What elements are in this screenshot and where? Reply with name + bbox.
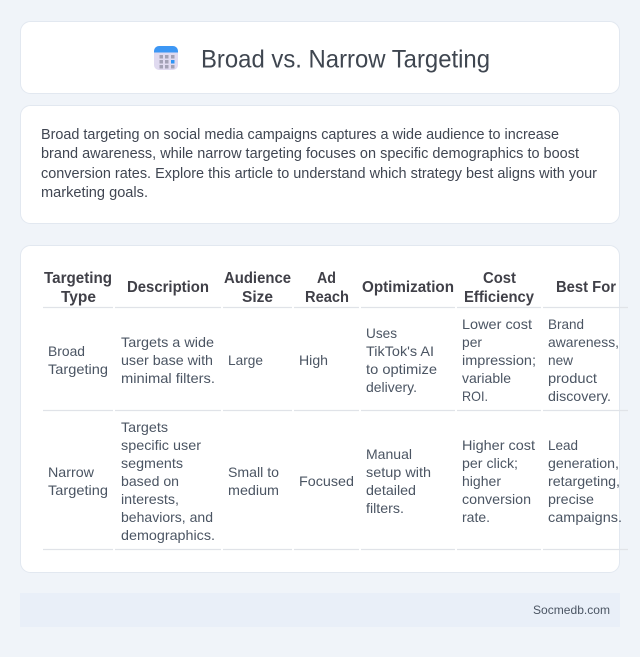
table row: broad targeting: to optimize xyxy=(366,361,437,377)
table row: narrow targeting: detailed xyxy=(366,482,416,498)
text block: introduction: Broad targeting on social media campaigns captures a wide audience to increase xyxy=(41,127,559,143)
table header row: Cost xyxy=(483,270,517,287)
text block: introduction: brand awareness, while narrow targeting focuses on specific demographics to boost xyxy=(41,146,579,162)
table row: narrow targeting xyxy=(48,419,622,543)
table header row: Ad xyxy=(317,270,336,287)
table row: narrow targeting: generation, xyxy=(548,455,619,471)
table row: broad targeting: awareness, xyxy=(548,334,619,350)
table row: broad targeting: Broad xyxy=(48,343,85,359)
table header row: Description xyxy=(127,279,209,296)
table row: narrow targeting: based on xyxy=(121,473,179,489)
table header row: Targeting xyxy=(44,270,112,287)
table header row: Reach xyxy=(305,289,349,306)
table row: narrow targeting: medium xyxy=(228,482,279,498)
table row: narrow targeting: campaigns. xyxy=(548,509,622,525)
table row: narrow targeting: higher xyxy=(462,473,501,489)
table header row: Optimization xyxy=(362,279,454,296)
table row: narrow targeting: Focused xyxy=(299,473,354,489)
table row: broad targeting: TikTok's AI xyxy=(366,343,434,359)
table row: narrow targeting: setup with xyxy=(366,464,431,480)
table row: narrow targeting: filters. xyxy=(366,500,404,516)
table row: narrow targeting: Lead xyxy=(548,437,578,453)
table row: narrow targeting: Small to xyxy=(228,464,279,480)
table header row: Audience xyxy=(224,270,291,287)
table row: narrow targeting: demographics. xyxy=(121,527,215,543)
table row: broad targeting: High xyxy=(299,352,328,368)
table row: narrow targeting: segments xyxy=(121,455,183,471)
table row: broad targeting: Lower cost xyxy=(462,316,532,332)
table row: broad targeting: Brand xyxy=(548,316,584,332)
panel: header xyxy=(20,22,620,94)
table row: narrow targeting: Higher cost xyxy=(462,437,535,453)
table row: narrow targeting: conversion xyxy=(462,491,531,507)
table row: broad targeting: new xyxy=(548,352,574,368)
table row: broad targeting: user base with xyxy=(121,352,213,368)
table row: broad targeting: discovery. xyxy=(548,388,611,404)
table row: narrow targeting: Targets xyxy=(121,419,168,435)
text block: introduction: marketing goals. xyxy=(41,185,148,201)
icon: calendar xyxy=(154,46,178,70)
table header row: Type xyxy=(61,289,96,306)
text block: introduction: conversion rates. Explore this article to understand which strategy best aligns with your xyxy=(41,166,597,182)
table row: narrow targeting: rate. xyxy=(462,509,490,525)
table row: narrow targeting: per click; xyxy=(462,455,518,471)
table row: narrow targeting: Manual xyxy=(366,446,412,462)
table row: narrow targeting: Narrow xyxy=(48,464,95,480)
table row: broad targeting: product xyxy=(548,370,597,386)
table row: narrow targeting: interests, xyxy=(121,491,179,507)
footer: Socmedb.com xyxy=(533,603,610,617)
text block: introduction xyxy=(41,127,597,201)
table row: broad targeting: impression; xyxy=(462,352,536,368)
table row: broad targeting: Targeting xyxy=(48,361,108,377)
table row: broad targeting: Targets a wide xyxy=(121,334,214,350)
table row: broad targeting: ROI. xyxy=(462,388,488,404)
table row: broad targeting: delivery. xyxy=(366,379,417,395)
title: Broad vs. Narrow Targeting xyxy=(201,46,490,74)
footer xyxy=(20,593,620,627)
table header row: Efficiency xyxy=(464,289,534,306)
table header row xyxy=(44,270,616,306)
panel: comparison table xyxy=(20,246,628,572)
table header row: Best For xyxy=(556,279,616,296)
table row: broad targeting: minimal filters. xyxy=(121,370,215,386)
table row: narrow targeting: behaviors, and xyxy=(121,509,213,525)
table row: broad targeting: Uses xyxy=(366,325,397,341)
table row: narrow targeting: retargeting, xyxy=(548,473,620,489)
table row: narrow targeting: specific user xyxy=(121,437,201,453)
table row: broad targeting xyxy=(48,316,619,404)
table row: narrow targeting: Targeting xyxy=(48,482,108,498)
panel: introduction xyxy=(20,106,620,224)
table row: broad targeting: per xyxy=(462,334,482,350)
table row: broad targeting: variable xyxy=(462,370,511,386)
table row: broad targeting: Large xyxy=(228,352,263,368)
table row: narrow targeting: precise xyxy=(548,491,594,507)
table header row: Size xyxy=(242,289,273,306)
